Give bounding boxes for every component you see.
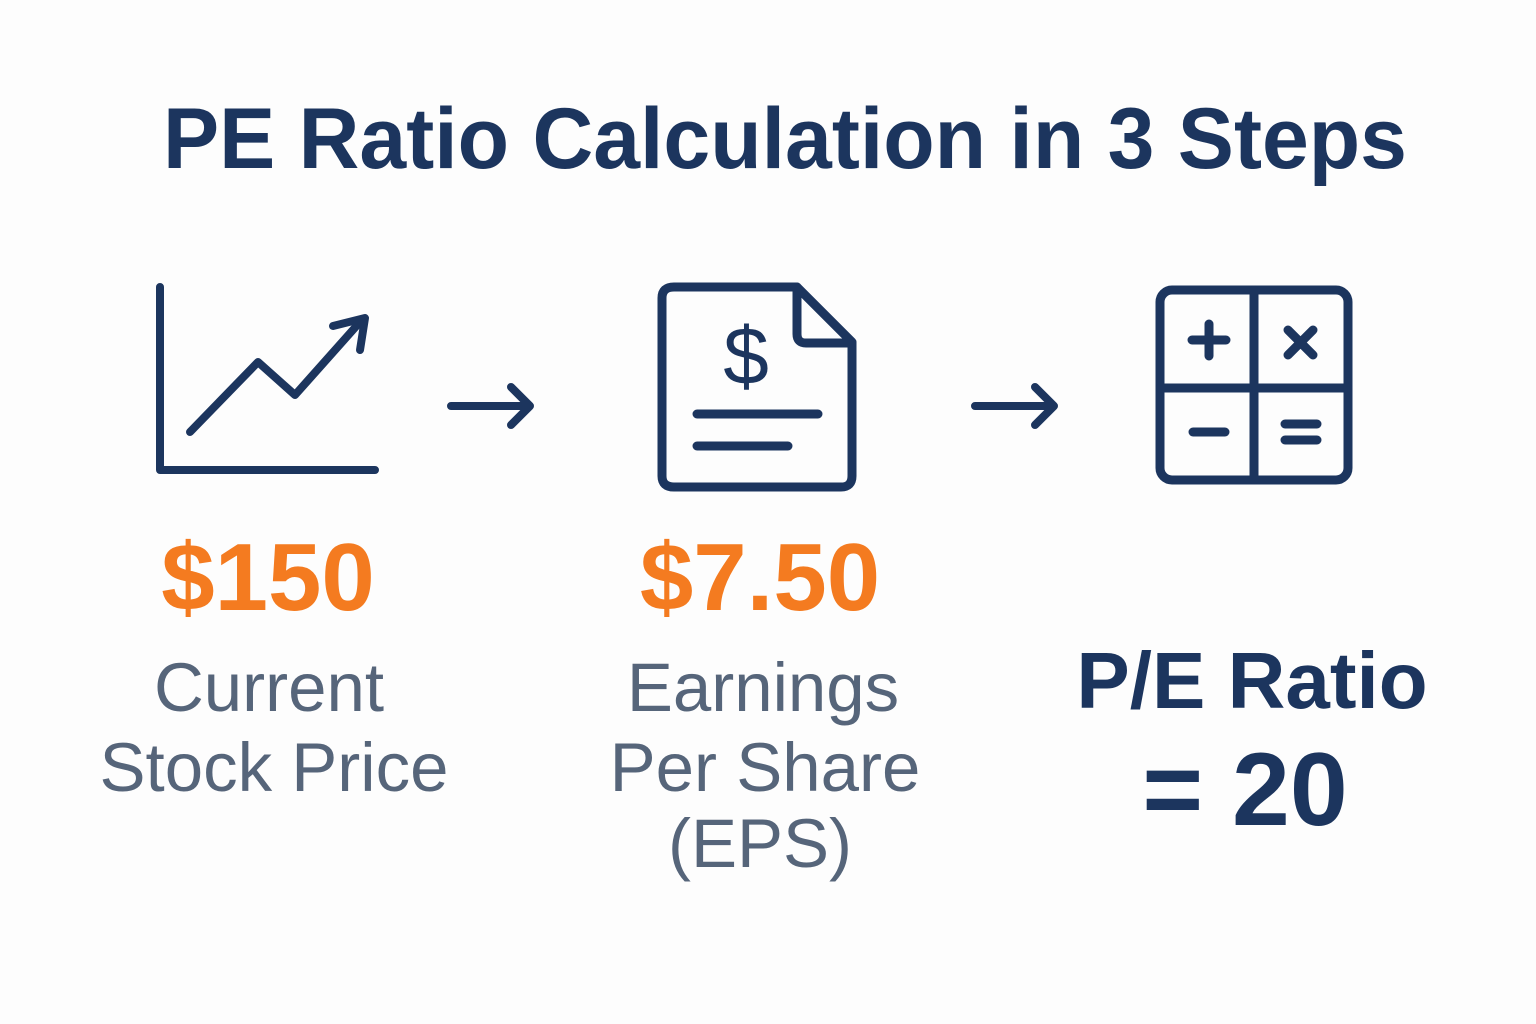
icon: earnings document	[662, 287, 852, 487]
label: earnings per share	[610, 649, 920, 882]
arrow 2	[975, 387, 1054, 425]
label: current stock price: Stock Price	[100, 729, 448, 806]
icon: stock chart	[160, 287, 375, 470]
result: PE ratio: = 20	[1142, 732, 1348, 848]
value: EPS: $7.50	[640, 524, 880, 631]
icon: calculator	[1160, 290, 1348, 480]
label: current stock price: Current	[154, 649, 384, 726]
label: earnings per share: (EPS)	[668, 805, 852, 882]
icon: earnings document: $	[723, 311, 769, 402]
result: PE ratio: P/E Ratio	[1076, 636, 1428, 725]
label: earnings per share: Per Share	[610, 729, 920, 806]
value: stock price: $150	[161, 524, 375, 631]
label: current stock price	[100, 649, 448, 806]
result: PE ratio	[1076, 636, 1428, 848]
arrow 1	[451, 387, 530, 425]
title: PE Ratio Calculation in 3 Steps	[163, 91, 1407, 187]
label: earnings per share: Earnings	[627, 649, 899, 726]
